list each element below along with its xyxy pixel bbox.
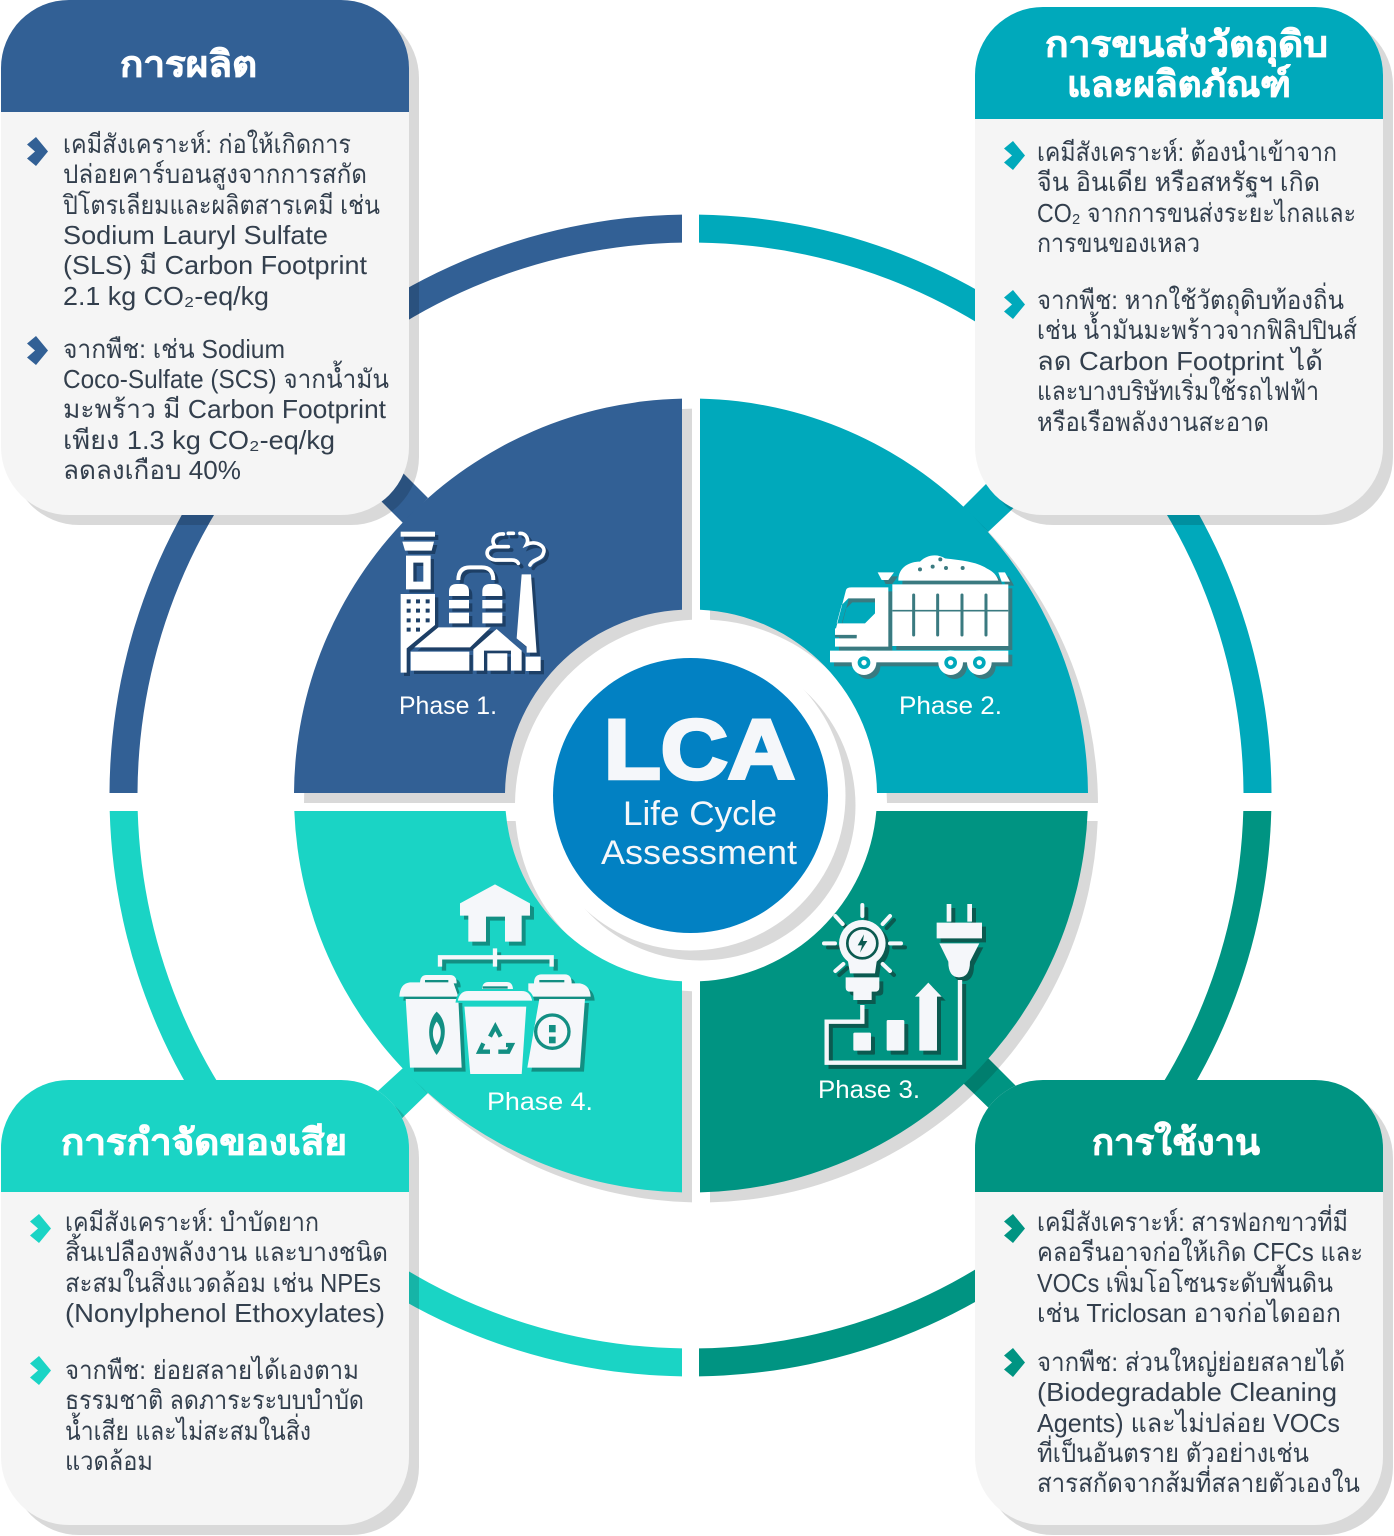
text block: plant based: (Biodegradable Cleaning bbox=[1037, 1377, 1337, 1407]
panel header bbox=[1, 1080, 409, 1192]
label: Phase 4: Phase 4. bbox=[487, 1088, 593, 1116]
bullet icon bbox=[1004, 1214, 1025, 1243]
text block: plant based: สารสกัดจากส้มที่สลายตัวเองใน bbox=[1037, 1465, 1360, 1498]
bullet icon bbox=[30, 1214, 51, 1243]
text block: plant based: Agents) และไม่ปล่อย VOCs bbox=[1037, 1408, 1340, 1438]
connector: phase 2 to card bbox=[963, 475, 1022, 532]
subtitle line 1: Life Cycle bbox=[623, 795, 777, 833]
text block: synthetic chemicals: เคมีสังเคราะห์: บำบัดยาก bbox=[65, 1207, 319, 1237]
text block: plant based: ลด Carbon Footprint ได้ bbox=[1037, 346, 1323, 376]
text block: synthetic chemicals bbox=[1037, 1204, 1363, 1328]
text block: plant based: และบางบริษัทเริ่มใช้รถไฟฟ้า bbox=[1037, 373, 1319, 406]
bullet icon bbox=[27, 137, 48, 166]
panel: waste disposal card bbox=[1, 1080, 419, 1535]
text block: plant based: น้ำเสีย และไม่สะสมในสิ่ง bbox=[65, 1412, 311, 1446]
quadrant: phase 2 bbox=[700, 399, 1088, 793]
subtitle line 2: Assessment bbox=[601, 834, 798, 872]
quadrant: phase 1 bbox=[294, 399, 682, 793]
text block: synthetic chemicals: คลอรีนอาจก่อให้เกิด CFCs และ bbox=[1037, 1237, 1363, 1267]
text block: synthetic chemicals: เคมีสังเคราะห์: สารฟอกขาวที่มี bbox=[1037, 1204, 1348, 1237]
label: Phase 1: Phase 1. bbox=[399, 692, 497, 720]
text block: plant based bbox=[1037, 282, 1357, 437]
text block: synthetic chemicals: สิ้นเปลืองพลังงาน และบางชนิด bbox=[65, 1233, 388, 1267]
text block: plant based bbox=[65, 1355, 364, 1476]
text block: plant based: แวดล้อม bbox=[65, 1446, 153, 1476]
text block: plant based: มะพร้าว มี Carbon Footprint bbox=[63, 394, 387, 424]
text block: plant based: หรือเรือพลังงานสะอาด bbox=[1037, 407, 1269, 437]
icon: truck bbox=[830, 555, 1014, 679]
bullet icon bbox=[1004, 290, 1025, 319]
centre badge: LCA bbox=[553, 658, 828, 933]
quadrant shadows bbox=[304, 409, 1098, 1202]
text block: synthetic chemicals: CO₂ จากการขนส่งระยะไกลและ bbox=[1037, 198, 1356, 228]
centre white disc bbox=[536, 640, 846, 950]
text block: plant based: จากพืช: หากใช้วัตถุดิบท้องถิ่น bbox=[1037, 282, 1344, 316]
text block: synthetic chemicals: จีน อินเดีย หรือสหรัฐฯ เกิด bbox=[1037, 167, 1320, 198]
text block: synthetic chemicals: สะสมในสิ่งแวดล้อม เช่น NPEs bbox=[65, 1265, 381, 1298]
heading: การกำจัดของเสีย bbox=[61, 1122, 347, 1162]
text block: plant based: เช่น น้ำมันมะพร้าวจากฟิลิปปินส์ bbox=[1037, 311, 1357, 345]
text block: synthetic chemicals: เคมีสังเคราะห์: ต้องนำเข้าจาก bbox=[1037, 137, 1337, 167]
icon: house and recycling bins bbox=[399, 884, 595, 1075]
text block: synthetic chemicals: ปล่อยคาร์บอนสูงจากการสกัด bbox=[63, 159, 367, 190]
text block: plant based bbox=[1037, 1347, 1360, 1498]
quadrant: phase 3 bbox=[700, 811, 1088, 1192]
bullet icon bbox=[1004, 1348, 1025, 1377]
outer ring: phase 3 arc bbox=[699, 811, 1271, 1376]
text block: plant based: Coco-Sulfate (SCS) จากน้ำมัน bbox=[63, 360, 389, 394]
heading bbox=[1045, 24, 1328, 104]
text block: synthetic chemicals: ปิโตรเลียมและผลิตสารเคมี เช่น bbox=[62, 190, 380, 220]
text block: synthetic chemicals: การขนของเหลว bbox=[1037, 228, 1200, 258]
outer ring: phase 1 arc bbox=[110, 215, 682, 793]
heading: การผลิต bbox=[120, 44, 257, 84]
outer ring: phase 2 arc bbox=[699, 215, 1272, 793]
text block: plant based: ธรรมชาติ ลดภาระระบบบำบัด bbox=[65, 1385, 364, 1415]
quadrant: phase 4 bbox=[294, 811, 682, 1192]
text block: plant based: จากพืช: ย่อยสลายได้เองตาม bbox=[65, 1355, 359, 1385]
icon: light bulb, plug and rising bars bbox=[824, 904, 986, 1067]
label: Phase 3: Phase 3. bbox=[818, 1076, 920, 1104]
panel header bbox=[975, 7, 1383, 119]
text block: synthetic chemicals: Sodium Lauryl Sulfate bbox=[63, 220, 328, 250]
panel: production card bbox=[1, 0, 419, 525]
bullet icon bbox=[1004, 141, 1025, 170]
heading: การใช้งาน bbox=[1092, 1120, 1260, 1162]
text block: synthetic chemicals bbox=[62, 129, 380, 311]
icon: factory bbox=[401, 532, 547, 676]
text block: plant based: ลดลงเกือบ 40% bbox=[63, 455, 241, 485]
text block: plant based: จากพืช: ส่วนใหญ่ย่อยสลายได้ bbox=[1037, 1347, 1345, 1377]
connector: phase 1 to card bbox=[370, 465, 428, 523]
text block: synthetic chemicals: VOCs เพิ่มโอโซนระดับพื้นดิน bbox=[1037, 1264, 1333, 1298]
text block: synthetic chemicals: เช่น Triclosan อาจก่อไดออก bbox=[1037, 1298, 1341, 1328]
text block: synthetic chemicals bbox=[65, 1207, 388, 1328]
heading: LCA: LCA bbox=[604, 702, 795, 796]
text block: synthetic chemicals: 2.1 kg CO₂-eq/kg bbox=[63, 281, 269, 311]
panel header bbox=[975, 1080, 1383, 1192]
text block: plant based bbox=[63, 334, 389, 485]
text block: plant based: เพียง 1.3 kg CO₂-eq/kg bbox=[63, 425, 335, 455]
panel header bbox=[1, 0, 409, 112]
bullet icon bbox=[30, 1356, 51, 1385]
label: Phase 2: Phase 2. bbox=[899, 692, 1002, 720]
outer ring: phase 4 arc bbox=[110, 811, 682, 1376]
bullet icon bbox=[27, 336, 48, 365]
heading: การขนส่งวัตถุดิบ bbox=[1045, 24, 1328, 68]
text block: synthetic chemicals: เคมีสังเคราะห์: ก่อให้เกิดการ bbox=[63, 129, 351, 159]
text block: plant based: ที่เป็นอันตราย ตัวอย่างเช่น bbox=[1037, 1435, 1309, 1468]
connector: phase 4 to card bbox=[368, 1068, 428, 1125]
text block: synthetic chemicals bbox=[1037, 137, 1356, 258]
connector: phase 3 to card bbox=[963, 1058, 1025, 1117]
text block: plant based: จากพืช: เช่น Sodium bbox=[63, 334, 285, 364]
text block: synthetic chemicals: (Nonylphenol Ethoxylates) bbox=[65, 1298, 385, 1328]
heading: และผลิตภัณฑ์ bbox=[1067, 64, 1291, 104]
text block: synthetic chemicals: (SLS) มี Carbon Footprint bbox=[63, 250, 368, 280]
panel: usage card bbox=[975, 1080, 1393, 1535]
panel: transport card bbox=[975, 7, 1393, 525]
centre disc shadow bbox=[546, 650, 856, 960]
